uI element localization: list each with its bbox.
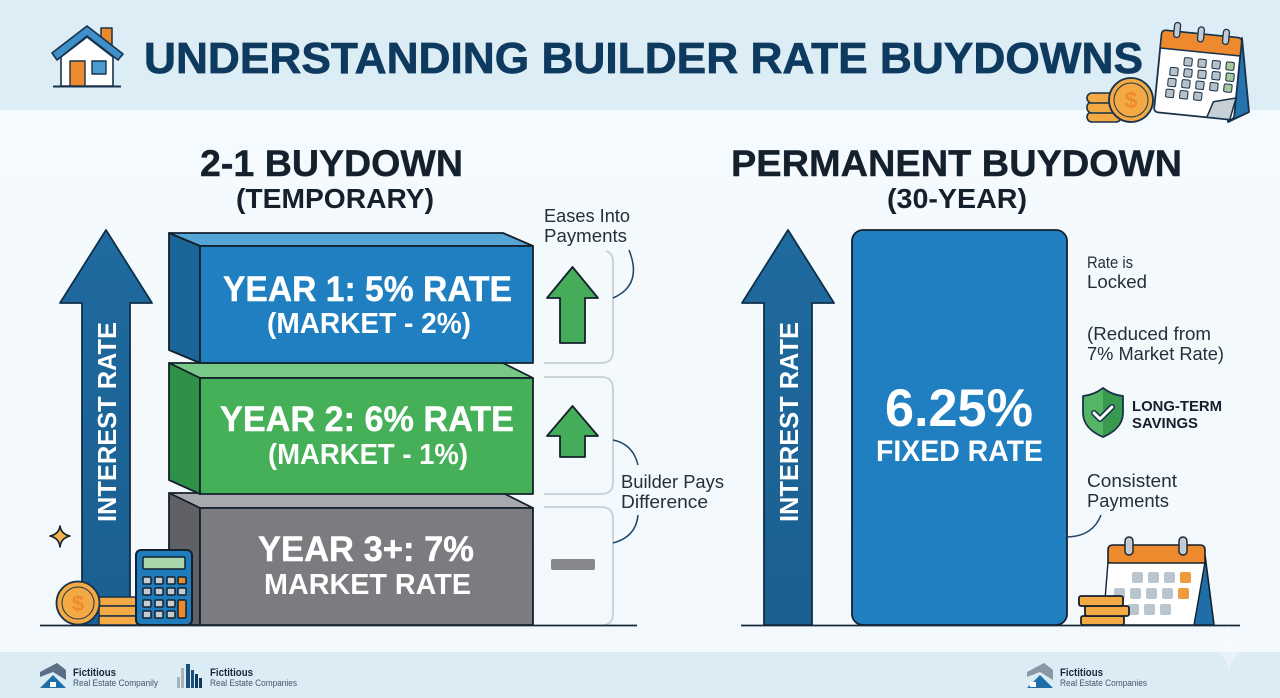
arrow: interest rate axis: INTEREST RATE [774, 322, 804, 522]
footer logo: real estate companily: Fictitious [73, 667, 116, 679]
arrow: interest rate axis [60, 230, 152, 625]
heading: 2-1 buydown: 2-1 BUYDOWN [200, 143, 463, 184]
callout: builder pays difference: Difference [621, 492, 708, 512]
note: rate is locked [1087, 253, 1147, 292]
callout: eases into payments: Payments [544, 226, 627, 246]
block: fixed rate [852, 230, 1067, 625]
badge: long-term savings: LONG-TERM [1132, 398, 1222, 415]
icon: sparkle [50, 526, 70, 547]
block: year 1 rate: (MARKET - 2%) [267, 308, 471, 340]
icon: coins and desk calendar [1087, 21, 1249, 122]
block: year 3 market rate [169, 493, 533, 625]
footer logo: real estate companily [40, 663, 158, 688]
note: reduced from market rate [1087, 324, 1224, 364]
badge: long-term savings [1083, 388, 1222, 437]
title: UNDERSTANDING BUILDER RATE BUYDOWNS [144, 34, 1143, 83]
bracket: year 2 indicator [544, 377, 613, 494]
icon: coins: $ [72, 591, 84, 616]
icon: calendar with coins [1079, 537, 1214, 625]
icon: house [52, 26, 123, 86]
block: year 2 rate: YEAR 2: 6% RATE [220, 400, 514, 439]
icon: coins and desk calendar: $ [1125, 87, 1138, 113]
block: year 1 rate [169, 233, 533, 363]
block: year 2 rate [169, 363, 533, 494]
callout: consistent payments: Consistent [1087, 471, 1177, 491]
footer logo: real estate companies: Fictitious [210, 667, 253, 679]
footer band [0, 652, 1280, 698]
panel: 2-1 buydown [40, 143, 724, 626]
heading: permanent buydown: PERMANENT BUYDOWN [731, 143, 1182, 184]
callout: consistent payments: Payments [1087, 491, 1169, 511]
panel: permanent buydown [731, 143, 1240, 626]
block: fixed rate: 6.25% [885, 379, 1033, 438]
footer logo: real estate companily: Real Estate Companily [73, 678, 158, 688]
icon: calculator [136, 550, 192, 625]
callout: builder pays difference: Builder Pays [621, 472, 724, 492]
callout: consistent payments [1068, 471, 1177, 537]
block: year 1 rate: YEAR 1: 5% RATE [223, 270, 512, 309]
footer logo: real estate companies right: Fictitious [1060, 667, 1103, 679]
block: year 3 market rate: YEAR 3+: 7% [258, 530, 474, 569]
bracket: year 3 indicator [544, 507, 613, 625]
subheading: temporary: (TEMPORARY) [236, 183, 434, 214]
callout: eases into payments: Eases Into [544, 206, 630, 226]
icon: coins [56, 582, 139, 625]
callout: builder pays difference [613, 440, 724, 543]
footer logo: real estate companies right: Real Estate Companies [1060, 678, 1147, 688]
callout: eases into payments [544, 206, 633, 298]
footer logo: real estate companies [177, 664, 297, 688]
note: rate is locked: Rate is [1087, 253, 1133, 272]
badge: long-term savings: SAVINGS [1132, 415, 1198, 432]
footer logo: real estate companies right [1027, 663, 1147, 688]
arrow: interest rate axis: INTEREST RATE [92, 322, 122, 522]
note: reduced from market rate: 7% Market Rate) [1087, 344, 1224, 364]
block: year 3 market rate: MARKET RATE [264, 569, 471, 601]
footer logo: real estate companies: Real Estate Companies [210, 678, 297, 688]
block: year 2 rate: (MARKET - 1%) [268, 439, 468, 471]
bracket: year 1 indicator [544, 251, 613, 363]
subheading: 30-year: (30-YEAR) [887, 183, 1027, 214]
header band [0, 0, 1280, 110]
arrow: interest rate axis [742, 230, 834, 625]
note: reduced from market rate: (Reduced from [1087, 324, 1211, 344]
block: fixed rate: FIXED RATE [876, 435, 1043, 468]
note: rate is locked: Locked [1087, 272, 1147, 292]
decorative sparkle mark [1208, 625, 1250, 670]
